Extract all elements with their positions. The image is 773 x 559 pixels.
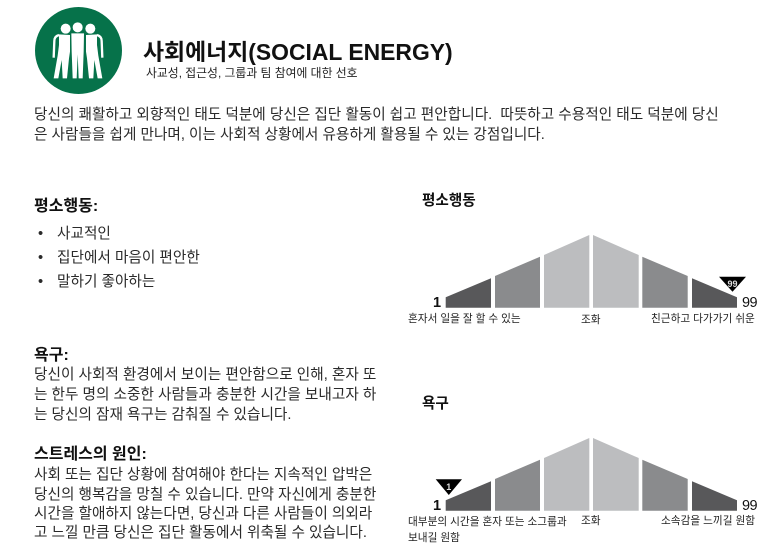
scale end: 1: 1 xyxy=(433,498,440,514)
chart heading: usual behavior: 평소행동 xyxy=(422,193,476,209)
bullet list: 말하기 좋아하는 xyxy=(57,274,155,290)
chart: needs scale: 1 xyxy=(446,482,451,492)
scale label: left: 보내길 원함 xyxy=(408,532,460,544)
heading: causes of stress: 스트레스의 원인: xyxy=(34,446,147,462)
scale label: right: 친근하고 다가가기 쉬운 xyxy=(651,313,755,325)
scale label: left: 대부분의 시간을 혼자 또는 소그룹과 xyxy=(408,516,567,528)
needs text: 당신이 사회적 환경에서 보이는 편안함으로 인해, 혼자 또 xyxy=(34,367,376,383)
scale label: center: 조화 xyxy=(581,515,601,527)
subtitle: 사교성, 접근성, 그룹과 팀 참여에 대한 선호 xyxy=(146,66,358,80)
scale end: 1: 1 xyxy=(433,295,440,311)
scale end: 99: 99 xyxy=(742,295,757,311)
scale end: 99: 99 xyxy=(742,498,757,514)
heading: usual behavior: 평소행동: xyxy=(34,198,98,214)
chart heading: needs: 욕구 xyxy=(422,396,449,412)
scale label: left xyxy=(408,516,567,544)
scale label: right: 소속감을 느끼길 원함 xyxy=(661,515,755,527)
bullet list: 사교적인 xyxy=(57,226,111,242)
title: 사회에너지(SOCIAL ENERGY) xyxy=(143,38,453,64)
needs text: 는 한두 명의 소중한 사람들과 충분한 시간을 보내고자 하 xyxy=(34,387,376,403)
intro text: 은 사람들을 쉽게 만나며, 이는 사회적 상황에서 유용하게 활용될 수 있는 강점입니다. xyxy=(34,127,545,143)
intro text xyxy=(34,106,719,143)
stress text: 시간을 할애하지 않는다면, 당신과 다른 사람들이 의외라 xyxy=(34,506,372,522)
bullet list xyxy=(38,226,200,290)
bullet list: • xyxy=(38,274,43,290)
scale label: left: 혼자서 일을 잘 할 수 있는 xyxy=(408,313,521,325)
bullet list: • xyxy=(38,226,43,242)
bullet list: 집단에서 마음이 편안한 xyxy=(57,250,200,266)
stress text xyxy=(34,466,376,541)
stress text: 사회 또는 집단 상황에 참여해야 한다는 지속적인 압박은 xyxy=(34,467,372,483)
scale label: center: 조화 xyxy=(581,314,601,326)
stress text: 당신의 행복감을 망칠 수 있습니다. 만약 자신에게 충분한 xyxy=(34,486,376,502)
chart: usual behavior scale: 99 xyxy=(727,279,738,289)
heading: needs: 욕구: xyxy=(34,346,69,364)
needs text xyxy=(34,366,376,423)
intro text: 당신의 쾌활하고 외향적인 태도 덕분에 당신은 집단 활동이 쉽고 편안합니다. 따뜻하고 수용적인 태도 덕분에 당신 xyxy=(34,107,719,123)
bullet list: • xyxy=(38,250,43,266)
needs text: 는 당신의 잠재 욕구는 감춰질 수 있습니다. xyxy=(34,407,291,423)
icon: green circle with group of people xyxy=(35,7,122,94)
stress text: 고 느낄 만큼 당신은 집단 활동에서 위축될 수 있습니다. xyxy=(34,525,367,541)
